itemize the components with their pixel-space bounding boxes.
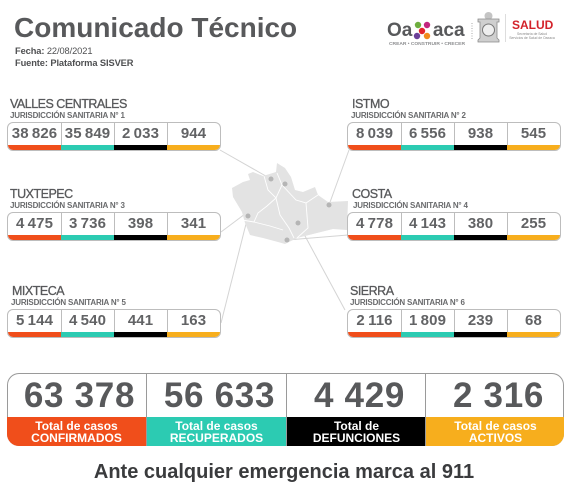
SALUD subtitle: Servicios de Salud de Oaxaca	[509, 36, 555, 40]
data row: 239	[468, 312, 493, 329]
data row: 441	[128, 312, 153, 329]
total: confirmed: CONFIRMADOS	[31, 431, 122, 445]
data row: 4 475	[16, 215, 53, 232]
data row: 944	[181, 125, 206, 142]
total: active: Total de casos	[454, 418, 537, 432]
logo: Oaxaca	[387, 20, 465, 47]
total: deaths	[286, 373, 426, 446]
data row: 380	[468, 215, 493, 232]
region borders	[242, 173, 318, 238]
total: deaths: 4 429	[314, 376, 405, 415]
connector lines	[220, 150, 349, 323]
total: recovered: 56 633	[164, 376, 275, 415]
date and source	[15, 46, 134, 68]
SALUD subtitle	[509, 32, 555, 40]
total: deaths: DEFUNCIONES	[313, 431, 400, 445]
jurisdiction: JURISDICCIÓN SANITARIA N° 6	[350, 298, 465, 307]
data row	[347, 212, 561, 241]
data row: 2 033	[122, 125, 159, 142]
data row	[347, 309, 561, 338]
emergency message: Ante cualquier emergencia marca al 911	[94, 461, 474, 483]
data row: 255	[521, 215, 546, 232]
data row: 38 826	[12, 125, 57, 142]
data row	[7, 212, 221, 241]
data row: 8 039	[356, 125, 393, 142]
data row: 341	[181, 215, 206, 232]
state silhouette	[232, 163, 348, 244]
panel: Mixteca	[7, 284, 221, 338]
panel: state totals	[7, 373, 564, 446]
data row: 545	[521, 125, 546, 142]
data row: 4 143	[409, 215, 446, 232]
data row: 35 849	[65, 125, 110, 142]
jurisdiction: JURISDICCIÓN SANITARIA N° 5	[11, 298, 126, 307]
panel: Valles Centrales	[7, 97, 221, 151]
region markers	[246, 176, 332, 242]
panel: Tuxtepec	[7, 187, 221, 241]
logo: SALUD	[505, 14, 556, 42]
data row: 1 809	[409, 312, 446, 329]
data row	[347, 122, 561, 151]
jurisdiction: JURISDICCIÓN SANITARIA N° 4	[353, 201, 468, 210]
total: active	[425, 373, 565, 446]
data row	[7, 309, 221, 338]
SALUD wordmark: SALUD	[512, 18, 553, 32]
region name: SIERRA	[350, 284, 394, 298]
logo wordmark: Oa aca	[387, 20, 465, 41]
total: confirmed: 63 378	[24, 376, 135, 415]
data row: 163	[181, 312, 206, 329]
total: recovered: Total de casos	[175, 418, 258, 432]
total: confirmed	[7, 376, 146, 446]
total: confirmed: Total de casos	[35, 418, 118, 432]
region name: VALLES CENTRALES	[10, 97, 127, 111]
panel: Sierra	[347, 284, 561, 338]
logo tagline: CREAR • CONSTRUIR • CRECER	[389, 42, 465, 47]
data row: 3 736	[69, 215, 106, 232]
title: Comunicado Técnico	[14, 12, 297, 43]
jurisdiction: JURISDICCIÓN SANITARIA N° 2	[351, 111, 466, 120]
data row: 68	[525, 312, 542, 329]
panel: Istmo	[347, 97, 561, 151]
data row	[7, 122, 221, 151]
SALUD subtitle: Secretaría de Salud	[517, 32, 547, 36]
data row: 4 778	[356, 215, 393, 232]
region name: TUXTEPEC	[10, 187, 73, 201]
data row: 5 144	[16, 312, 53, 329]
region name: MIXTECA	[12, 284, 64, 298]
total: deaths: Total de	[334, 418, 379, 432]
total: recovered	[146, 373, 286, 446]
data row: 6 556	[409, 125, 446, 142]
logo flower	[414, 22, 430, 40]
data row: 398	[128, 215, 153, 232]
data row: 4 540	[69, 312, 106, 329]
data row: 2 116	[356, 312, 393, 329]
jurisdiction: JURISDICCIÓN SANITARIA N° 3	[10, 201, 125, 210]
total: active: ACTIVOS	[469, 431, 522, 445]
date and source: Fuente: Plataforma SISVER	[15, 58, 133, 68]
total: recovered: RECUPERADOS	[170, 431, 263, 445]
region name: COSTA	[352, 187, 392, 201]
data row: 938	[468, 125, 493, 142]
region name: ISTMO	[352, 97, 389, 111]
total: active: 2 316	[453, 376, 544, 415]
date and source: Fecha: 22/08/2021	[15, 46, 92, 56]
logo: state shield	[472, 12, 500, 42]
jurisdiction: JURISDICCIÓN SANITARIA N° 1	[10, 111, 125, 120]
panel: Costa	[347, 187, 561, 241]
